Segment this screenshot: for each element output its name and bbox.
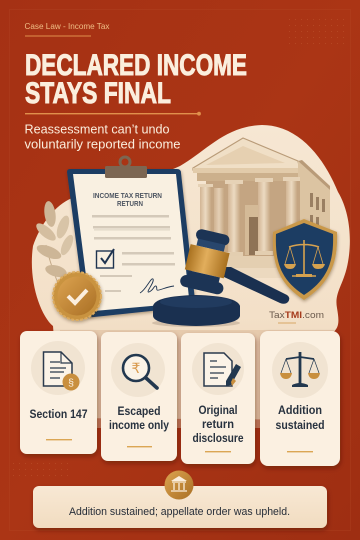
card: Addition sustained: Addition (278, 403, 322, 417)
icon: document with section seal: § (68, 377, 74, 389)
icon: courthouse badge (164, 470, 194, 500)
title rule (25, 112, 201, 116)
cream backdrop blob (32, 125, 350, 420)
illustration: courthouse (188, 138, 330, 278)
form lines (92, 215, 175, 292)
card: Addition sustained (260, 331, 340, 466)
clipboard clip (105, 157, 147, 178)
icon: document with pen (204, 353, 241, 386)
card: Original return disclosure: Original (198, 403, 238, 417)
card: Original return disclosure: disclosure (192, 431, 244, 445)
conclusion bar: Addition sustained; appellate order was upheld. (69, 506, 290, 518)
title (25, 49, 247, 110)
card: Addition sustained: sustained (276, 418, 324, 432)
illustration: laurel leaves (34, 200, 76, 300)
card: Original return disclosure (181, 333, 255, 464)
icon: scales (280, 352, 320, 387)
card: Section 147 (20, 331, 97, 454)
subtitle: Reassessment can’t undo (24, 122, 170, 136)
card: Section 147: Section 147 (30, 407, 88, 421)
eyebrow label: Case Law - Income Tax (24, 22, 110, 31)
illustration: shield (273, 219, 337, 300)
card: Escaped income only (101, 332, 177, 461)
conclusion bar (33, 486, 327, 528)
icon: magnifier with rupee: ₹ (132, 360, 141, 376)
illustration: gavel (152, 227, 289, 327)
title: STAYS FINAL (25, 77, 171, 110)
card: Escaped income only: Escaped (118, 404, 160, 418)
form heading: INCOME TAX RETURN (93, 193, 162, 200)
checkbox (96, 249, 114, 268)
subtitle (24, 122, 180, 152)
subtitle: voluntarily reported income (24, 136, 180, 152)
card: Escaped income only: income only (109, 418, 169, 432)
brand: TaxTMI.com (269, 310, 324, 321)
illustration: gold seal (53, 272, 101, 320)
form heading (93, 193, 162, 208)
signature (140, 279, 174, 293)
title: DECLARED INCOME (25, 49, 247, 82)
card: Original return disclosure: return (202, 417, 234, 431)
illustration: clipboard (67, 157, 195, 317)
form heading: RETURN (117, 201, 143, 208)
